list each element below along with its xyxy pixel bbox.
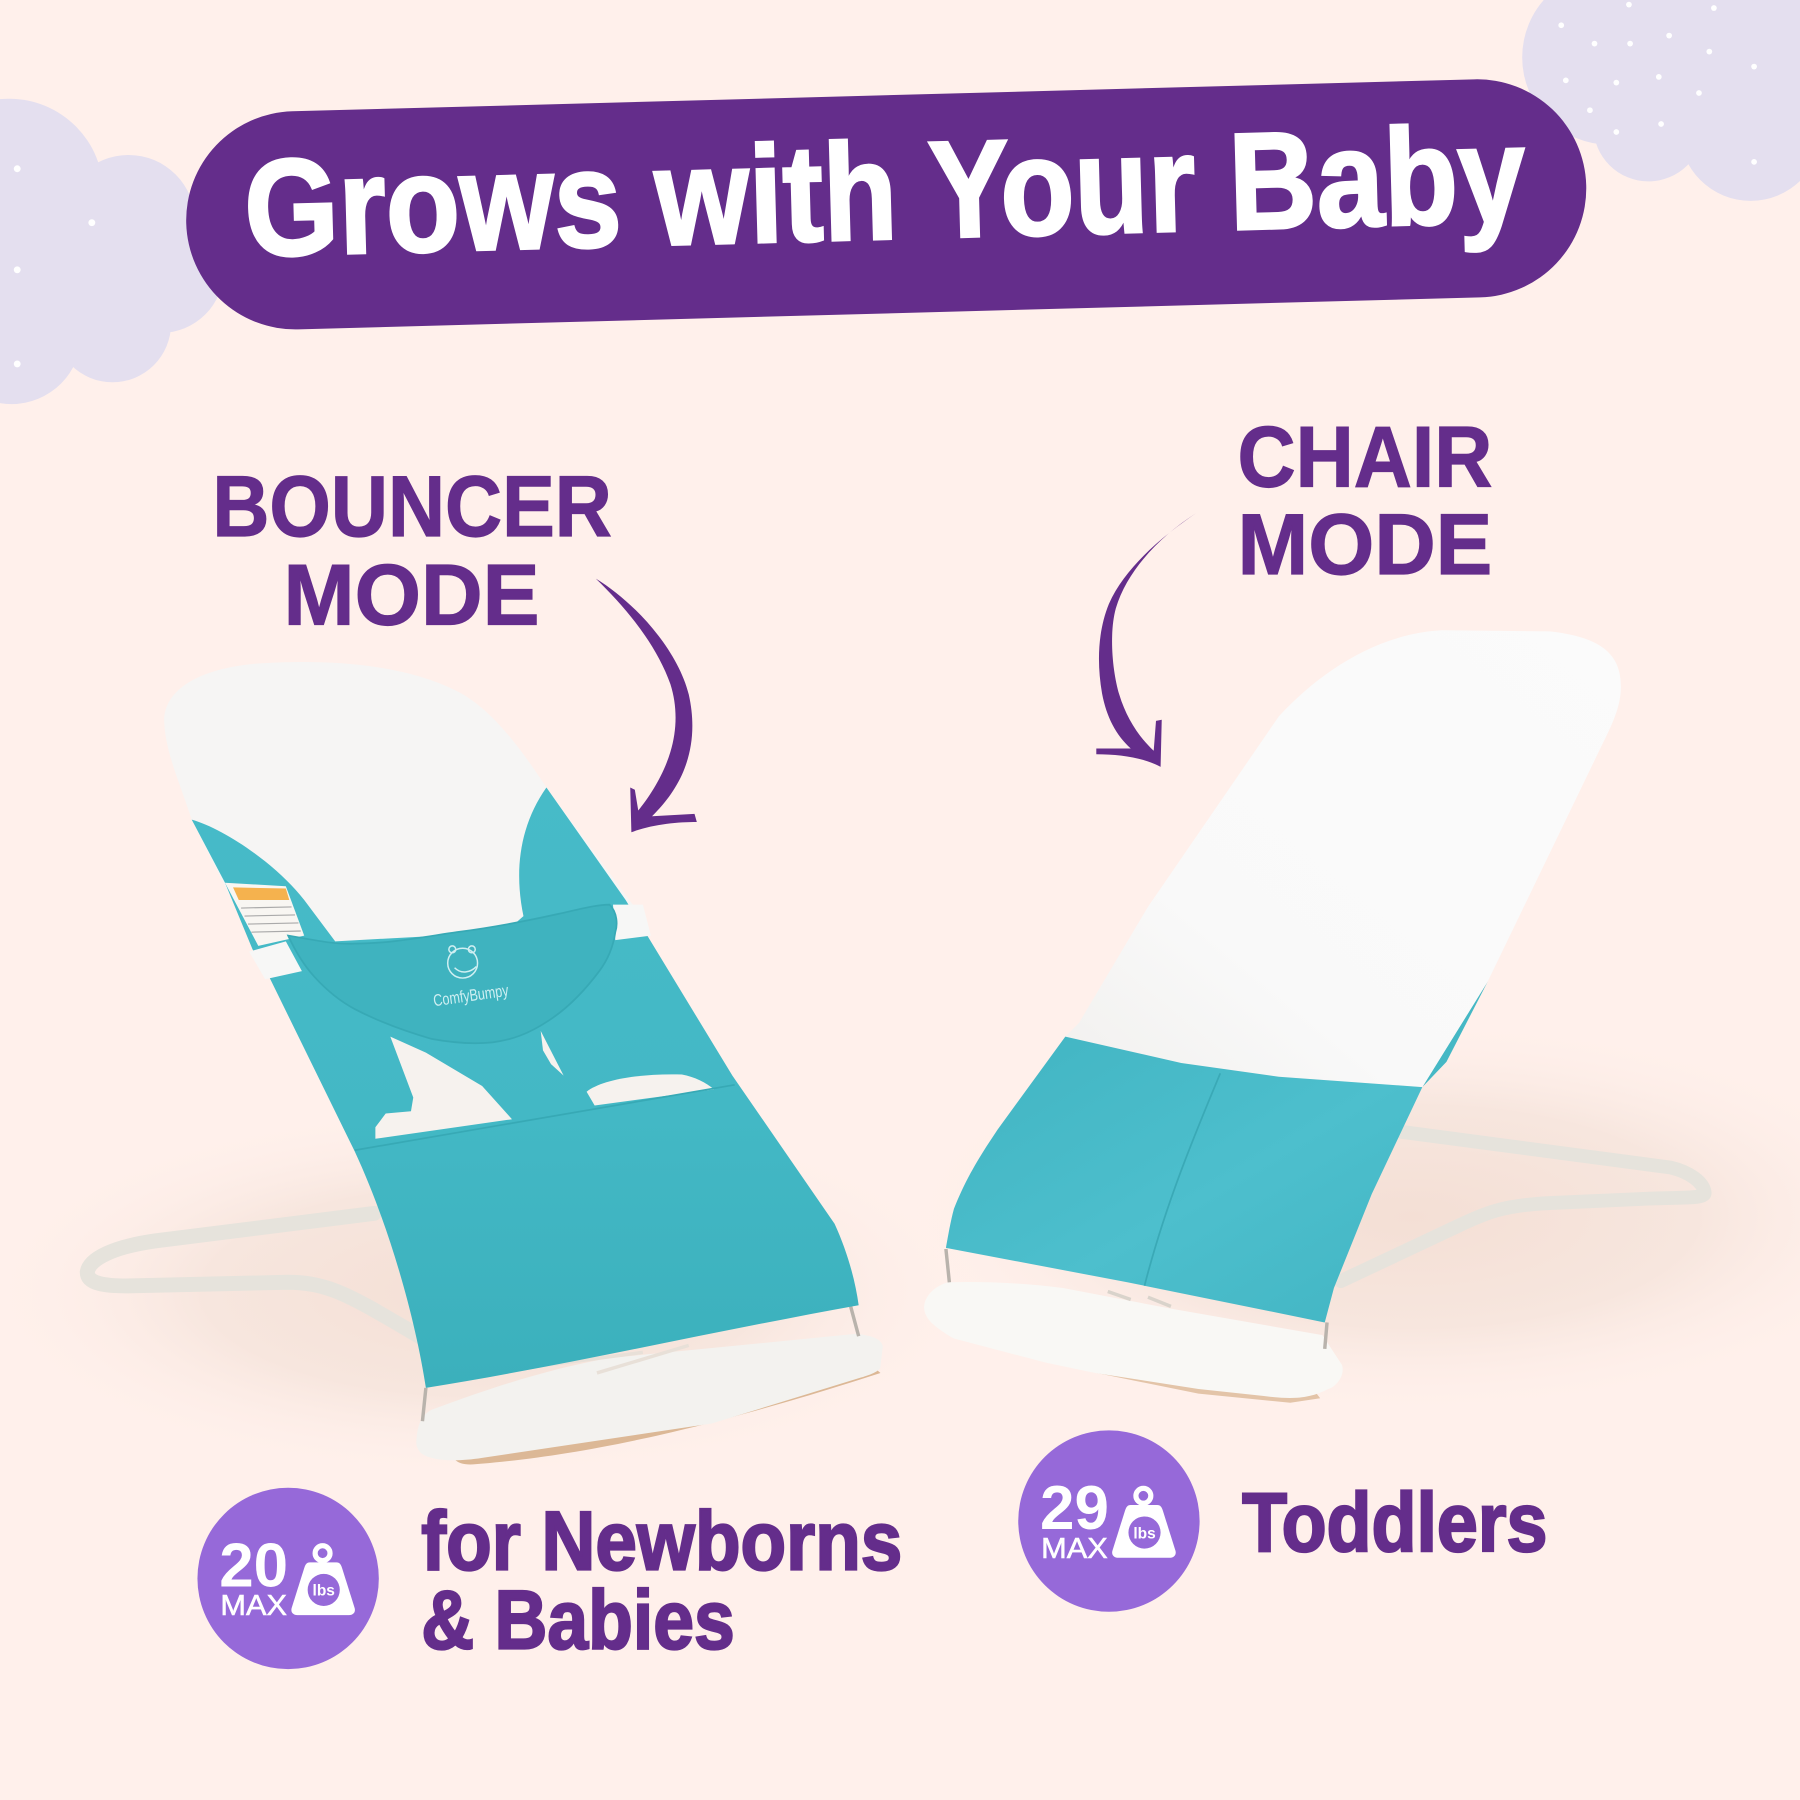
cloud: left <box>0 99 224 404</box>
floor shadow: right <box>895 1016 1800 1418</box>
bouncer right strap <box>613 905 651 940</box>
badge number: 29 <box>1040 1474 1109 1543</box>
bouncer teal fabric <box>192 788 859 1388</box>
caption: newborns and babies: & Babies <box>421 1572 735 1666</box>
chair side fabric <box>1422 982 1488 1087</box>
chair seat product <box>924 630 1705 1403</box>
chair base shadow edge <box>1091 1372 1320 1403</box>
bouncer pocket seam <box>355 1085 735 1150</box>
bouncer base shadow edge <box>453 1366 880 1464</box>
chair base <box>924 1282 1343 1398</box>
title banner <box>183 76 1589 332</box>
weight badge: 29 lbs <box>1018 1430 1200 1612</box>
heading: bouncer mode <box>212 459 612 643</box>
title text: Grows with Your Baby <box>242 98 1527 286</box>
heading: chair mode <box>1238 410 1492 593</box>
chair frame tube <box>1341 1132 1705 1281</box>
heading: bouncer mode: MODE <box>284 547 540 643</box>
caption: newborns and babies: for Newborns <box>421 1493 902 1587</box>
bouncer base slots <box>540 1345 689 1373</box>
floor shadow: left <box>0 1102 987 1481</box>
bouncer metal supports <box>422 1306 859 1421</box>
cloud: right <box>1522 0 1800 201</box>
bouncer seat product <box>87 662 883 1464</box>
icon: weight <box>291 1546 355 1615</box>
bouncer left strap <box>249 941 302 979</box>
arrow: bouncer mode <box>596 579 697 832</box>
title pill <box>183 76 1589 332</box>
bouncer frame tube <box>87 1213 427 1341</box>
badge MAX label: MAX <box>1041 1533 1108 1565</box>
bouncer warning label <box>225 883 304 946</box>
chair mesh back <box>1065 630 1621 1087</box>
heading: bouncer mode: BOUNCER <box>212 459 612 555</box>
chair teal fabric <box>946 1037 1422 1322</box>
icon: weight: lbs <box>1133 1525 1156 1542</box>
badge MAX label: MAX <box>220 1590 287 1622</box>
badge number: 20 <box>219 1531 288 1600</box>
bouncer mesh back <box>164 662 643 1033</box>
icon: weight <box>1112 1488 1176 1558</box>
icon: weight: lbs <box>313 1583 335 1600</box>
bouncer logo <box>432 946 510 1010</box>
weight badge: 20 lbs <box>197 1488 379 1669</box>
heading: chair mode: MODE <box>1238 497 1492 593</box>
heading: chair mode: CHAIR <box>1238 410 1492 506</box>
bouncer logo: ComfyBumpy <box>432 981 510 1010</box>
arrow: chair mode <box>1096 513 1196 767</box>
caption: newborns and babies <box>421 1493 902 1666</box>
chair metal supports <box>946 1249 1327 1349</box>
caption: toddlers: Toddlers <box>1242 1475 1547 1569</box>
bouncer base <box>416 1334 883 1460</box>
bouncer head pillow <box>288 905 617 1043</box>
chair base slots <box>1108 1291 1171 1306</box>
bouncer cutouts showing mesh <box>375 1031 714 1139</box>
chair fabric seam <box>1145 1073 1220 1286</box>
